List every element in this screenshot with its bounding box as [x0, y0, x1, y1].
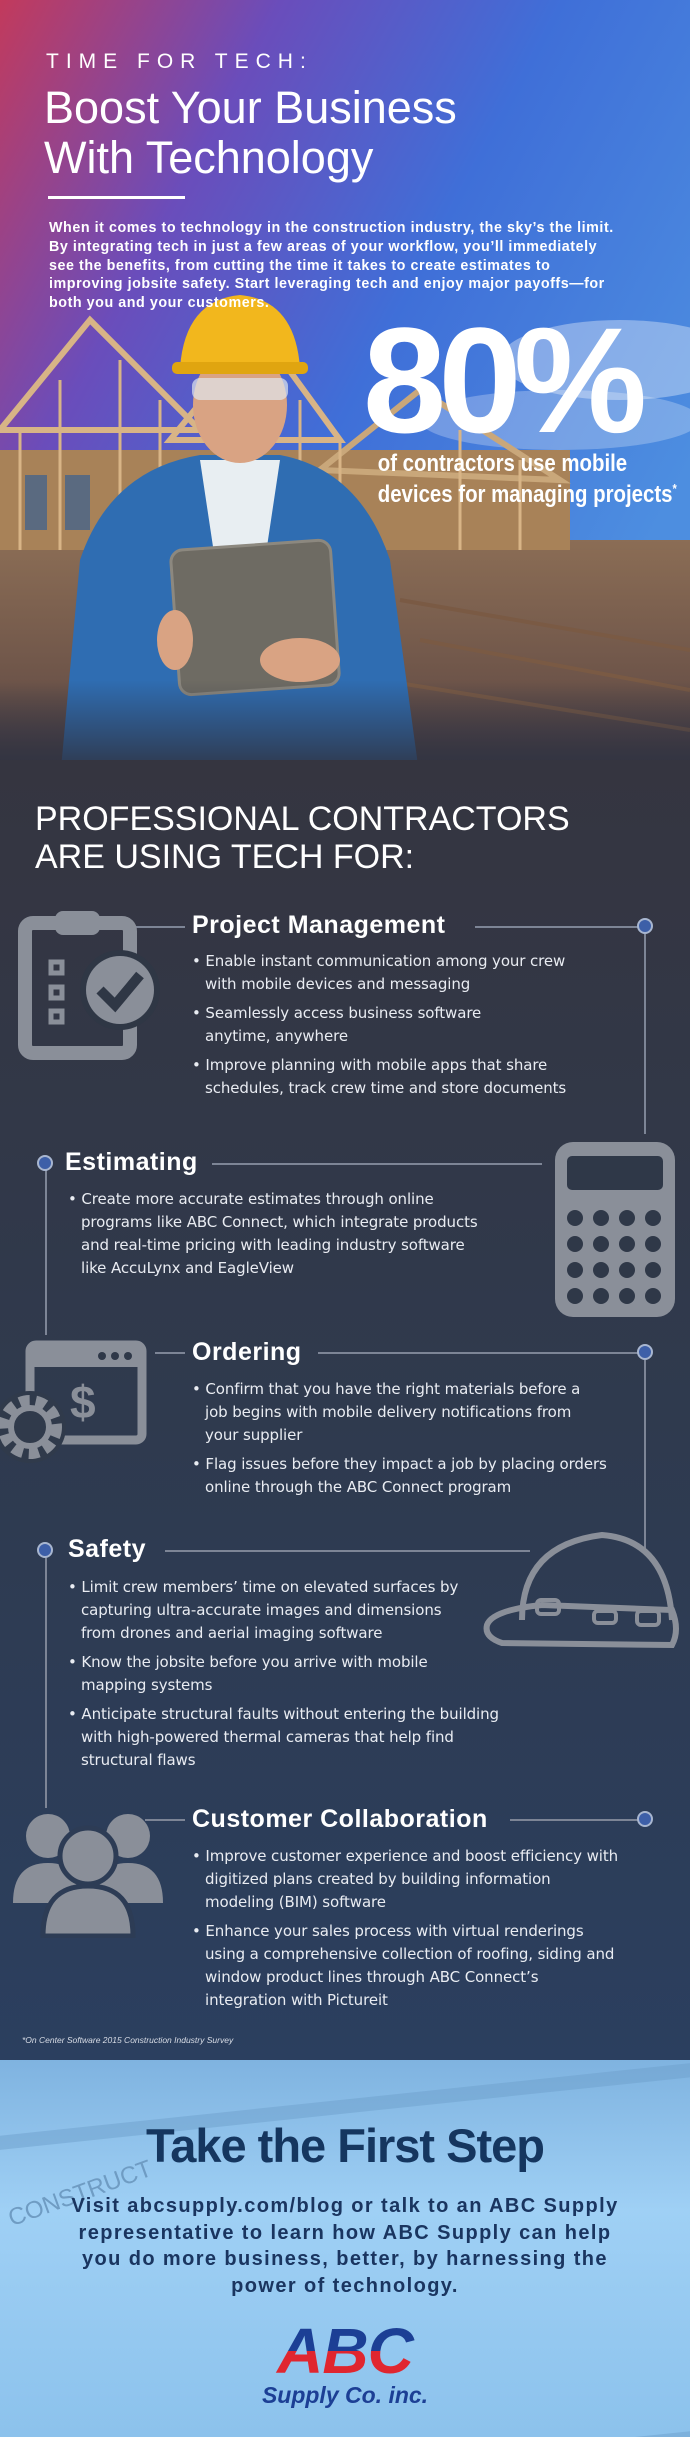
intro paragraph: both you and your customers. [49, 295, 269, 311]
bullets [68, 1578, 499, 1769]
cta text: Visit abcsupply.com/blog or talk to an ABC Supply [71, 2195, 619, 2217]
bullets [192, 1847, 618, 2009]
heading: customer collaboration: Customer Collaboration [192, 1805, 488, 1833]
cta heading: Take the First Step [146, 2119, 544, 2172]
bullets: modeling (BIM) software [205, 1893, 386, 1911]
cta text: representative to learn how ABC Supply can help [79, 2222, 611, 2244]
bullets: your supplier [205, 1426, 302, 1444]
title: With Technology [44, 132, 373, 183]
bullets: mapping systems [81, 1676, 212, 1694]
panel: safety [37, 1532, 679, 1769]
bullets [192, 952, 566, 1097]
bullets: and real-time pricing with leading industry software [81, 1236, 465, 1254]
title [44, 82, 457, 183]
stat: 80%: 80% [363, 296, 639, 464]
title: Boost Your Business [44, 82, 457, 133]
bullets: • Enhance your sales process with virtual renderings [192, 1922, 584, 1940]
cta text: you do more business, better, by harnessing the [82, 2248, 608, 2270]
bullets: • Create more accurate estimates through online [68, 1190, 434, 1208]
bullets: with mobile devices and messaging [205, 975, 470, 993]
stat: 80%: devices for managing projects* [378, 481, 677, 508]
panel: call to action: CONSTRUCT [5, 2155, 156, 2232]
bullets [192, 1380, 607, 1496]
dot [37, 1155, 53, 1171]
bullets: • Anticipate structural faults without entering the building [68, 1705, 499, 1723]
bullets: window product lines through ABC Connect’s [205, 1968, 538, 1986]
bullets: job begins with mobile delivery notifications from [205, 1403, 571, 1421]
intro paragraph: By integrating tech in just a few areas of your workflow, you’ll immediately [49, 239, 597, 255]
logo: ABC Supply [262, 2315, 428, 2408]
dot [637, 1344, 653, 1360]
bullets: using a comprehensive collection of roofing, siding and [205, 1945, 614, 1963]
section heading [35, 800, 570, 876]
heading: project management: Project Management [192, 911, 446, 939]
title underline [48, 196, 185, 199]
dot [637, 1811, 653, 1827]
heading: estimating: Estimating [65, 1148, 198, 1176]
bullets: • Limit crew members’ time on elevated surfaces by [68, 1578, 458, 1596]
icon: calculator [555, 1142, 675, 1317]
panel: customer collaboration [13, 1805, 653, 2009]
intro paragraph: When it comes to technology in the construction industry, the sky’s the limit. [49, 220, 614, 236]
logo: ABC Supply: Supply Co. inc. [262, 2382, 428, 2408]
cta text: power of technology. [231, 2274, 459, 2296]
icon: browser with dollar and gear [0, 1340, 146, 1459]
icon: hard hat [484, 1532, 679, 1648]
bullets: from drones and aerial imaging software [81, 1624, 382, 1642]
dot [637, 918, 653, 934]
stat: 80%: of contractors use mobile [378, 450, 627, 477]
icon: people [13, 1814, 163, 1934]
bullets: • Improve customer experience and boost efficiency with [192, 1847, 618, 1865]
section heading: PROFESSIONAL CONTRACTORS [35, 800, 570, 838]
bullets: • Seamlessly access business software [192, 1004, 481, 1022]
bullets: programs like ABC Connect, which integrate products [81, 1213, 478, 1231]
bullets: integration with Pictureit [205, 1991, 388, 2009]
intro paragraph: improving jobsite safety. Start leveraging tech and enjoy major payoffs—for [49, 276, 605, 292]
hero background photo illustration [0, 0, 690, 760]
cta text [71, 2195, 619, 2296]
bullets: • Flag issues before they impact a job by placing orders [192, 1455, 607, 1473]
panel: call to action [0, 2060, 690, 2437]
intro paragraph: see the benefits, from cutting the time it takes to create estimates to [49, 258, 550, 274]
dot [37, 1542, 53, 1558]
section heading: ARE USING TECH FOR: [35, 838, 414, 876]
bullets: • Enable instant communication among your crew [192, 952, 565, 970]
dark section background [0, 760, 690, 2060]
stat: 80% [363, 296, 677, 508]
icon: clipboard [18, 911, 154, 1060]
kicker: time for tech: TIME FOR TECH: [46, 50, 313, 73]
bullets: • Confirm that you have the right materials before a [192, 1380, 580, 1398]
bullets: capturing ultra-accurate images and dimensions [81, 1601, 441, 1619]
bullets: like AccuLynx and EagleView [81, 1259, 294, 1277]
bullets: structural flaws [81, 1751, 195, 1769]
bullets: • Improve planning with mobile apps that share [192, 1056, 547, 1074]
heading: safety: Safety [68, 1535, 146, 1563]
icon: browser with dollar and gear: $ [70, 1376, 96, 1428]
bullets: digitized plans created by building information [205, 1870, 551, 1888]
bullets: online through the ABC Connect program [205, 1478, 511, 1496]
panel: project management [18, 911, 653, 1097]
bullets: anytime, anywhere [205, 1027, 348, 1045]
heading: ordering: Ordering [192, 1338, 302, 1366]
bullets: • Know the jobsite before you arrive with mobile [68, 1653, 428, 1671]
footnote: *On Center Software 2015 Construction Industry Survey [22, 2035, 233, 2045]
logo: ABC Supply: ABC [277, 2315, 413, 2387]
panel: ordering [0, 1338, 653, 1496]
bullets: with high-powered thermal cameras that help find [81, 1728, 454, 1746]
panel: estimating [37, 1142, 675, 1317]
bullets [68, 1190, 478, 1277]
bullets: schedules, track crew time and store documents [205, 1079, 566, 1097]
intro paragraph [49, 220, 614, 311]
